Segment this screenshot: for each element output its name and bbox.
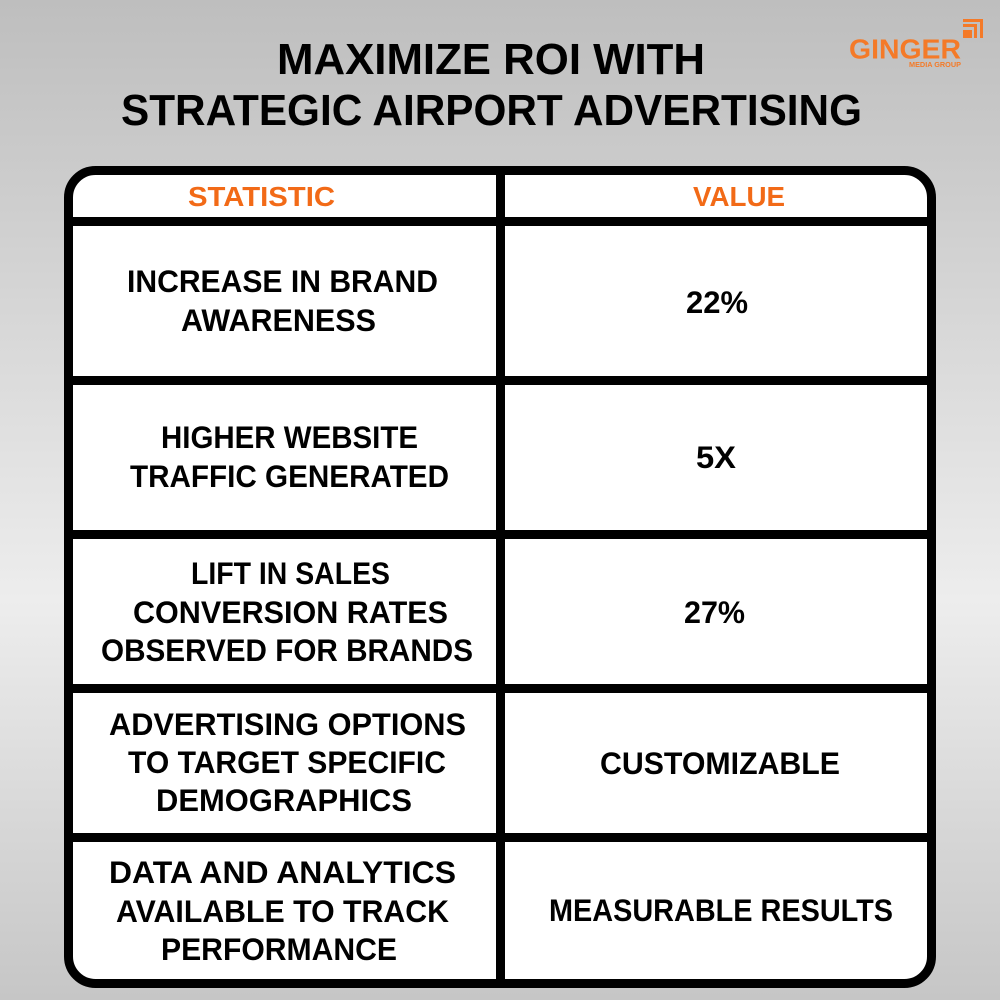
row 5 statistic: AVAILABLE TO TRACK — [116, 893, 449, 929]
row 3 value: 27% — [684, 594, 745, 630]
logo tagline: MEDIA GROUP — [909, 62, 961, 69]
row dividers — [68, 217, 932, 842]
row 2 statistic: HIGHER WEBSITE — [161, 419, 418, 455]
table frame — [68, 170, 932, 984]
row 1 statistic — [127, 263, 438, 338]
row 2 statistic: TRAFFIC GENERATED — [130, 458, 449, 494]
logo: Ginger Media Group — [849, 19, 983, 69]
row 1 statistic: INCREASE IN BRAND — [127, 263, 438, 299]
title: STRATEGIC AIRPORT ADVERTISING — [121, 86, 862, 135]
title — [121, 35, 862, 135]
row 4 statistic: TO TARGET SPECIFIC — [128, 744, 446, 780]
row 1 statistic: AWARENESS — [181, 302, 376, 338]
row 5 value: MEASURABLE RESULTS — [549, 892, 893, 928]
header: value: VALUE — [693, 181, 785, 212]
row 5 statistic: DATA AND ANALYTICS — [109, 854, 456, 890]
row 3 statistic: OBSERVED FOR BRANDS — [101, 632, 473, 668]
row 2 value: 5X — [696, 439, 736, 475]
row 1 value: 22% — [686, 284, 748, 320]
table — [68, 170, 932, 984]
row 3 statistic: LIFT IN SALES — [191, 555, 390, 591]
row 3 statistic: CONVERSION RATES — [133, 594, 448, 630]
row 5 statistic: PERFORMANCE — [161, 931, 397, 967]
row 4 value: CUSTOMIZABLE — [600, 745, 840, 781]
row 3 statistic — [101, 555, 473, 668]
logo wordmark: GINGER — [849, 34, 961, 64]
icon: logo squares — [963, 19, 983, 38]
row 5 statistic — [109, 854, 456, 967]
row 2 statistic — [130, 419, 449, 494]
row 4 statistic — [109, 706, 466, 818]
title: MAXIMIZE ROI WITH — [277, 35, 705, 84]
column divider — [496, 170, 505, 984]
row 4 statistic: ADVERTISING OPTIONS — [109, 706, 466, 742]
header: statistic: STATISTIC — [188, 181, 335, 212]
row 4 statistic: DEMOGRAPHICS — [156, 782, 412, 818]
